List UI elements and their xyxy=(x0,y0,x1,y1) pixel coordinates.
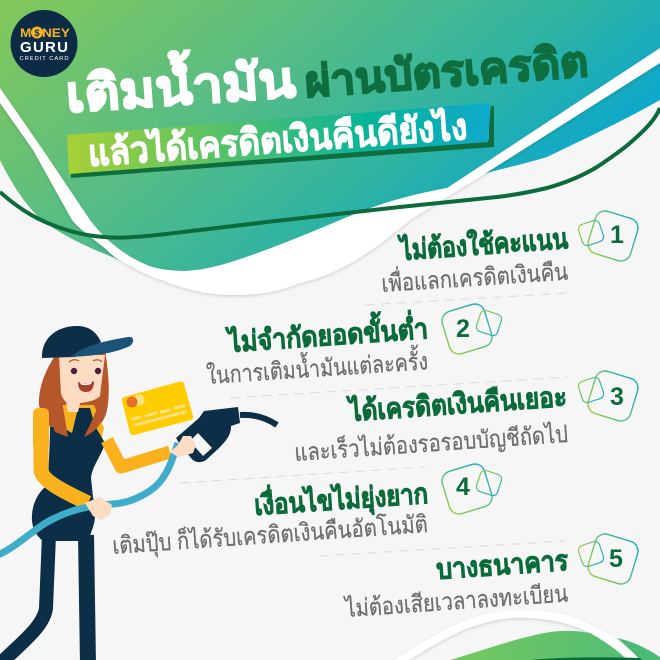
hair front strands xyxy=(50,355,68,437)
benefit 5 xyxy=(343,545,569,623)
benefit 4: เงื่อนไขไม่ยุ่งยาก xyxy=(253,473,429,523)
badge 3 xyxy=(577,369,640,423)
badge 2 xyxy=(440,302,503,356)
fuel nozzle xyxy=(176,407,277,462)
benefit 2: ไม่จำกัดยอดขั้นต่ำ xyxy=(224,307,429,358)
bottom wave xyxy=(395,614,660,660)
title line one: เติมน้ำมัน xyxy=(63,42,297,123)
benefit 5: ไม่ต้องเสียเวลาลงทะเบียน xyxy=(343,579,569,623)
badge 1: 1 xyxy=(610,221,624,249)
logo badge xyxy=(10,10,78,77)
header green wave xyxy=(0,0,660,271)
benefit 4 xyxy=(111,473,429,561)
badge 2: 2 xyxy=(456,315,470,343)
logo badge: GURU xyxy=(20,39,68,56)
title banner: แล้วได้เครดิตเงินคืนดียังไง xyxy=(87,105,469,174)
right hand xyxy=(170,436,196,457)
logo badge: $ xyxy=(34,28,40,38)
badge 5 xyxy=(577,532,640,586)
skirt and bib overalls xyxy=(32,408,105,541)
legs xyxy=(2,535,88,660)
title line one xyxy=(63,38,590,123)
benefit 3 xyxy=(293,380,569,467)
logo badge: CREDIT CARD xyxy=(20,56,68,62)
title line one: ผ่านบัตรเครดิต xyxy=(303,38,590,107)
shirt body xyxy=(52,405,104,445)
badge 4: 4 xyxy=(456,473,470,501)
left arm xyxy=(41,415,88,503)
hair back xyxy=(39,350,109,437)
hat dome xyxy=(42,326,101,358)
logo badge: MONEY xyxy=(20,26,70,40)
benefit 2: ในการเติมน้ำมันแต่ละครั้ง xyxy=(205,343,429,390)
benefit 1: ไม่ต้องใช้คะแนน xyxy=(397,222,569,266)
benefit 1: เพื่อแลกเครดิตเงินคืน xyxy=(380,255,569,298)
fuel hose xyxy=(0,443,178,555)
woman character with fuel nozzle xyxy=(0,326,277,660)
benefit 1 xyxy=(380,222,569,298)
benefit 2 xyxy=(205,307,429,390)
benefit 3: และเร็วไม่ต้องรอรอบบัญชีถัดไป xyxy=(293,419,569,467)
credit card xyxy=(122,381,193,435)
badge 4 xyxy=(440,462,503,516)
hat brim xyxy=(70,337,133,357)
mouth xyxy=(78,381,94,392)
right arm xyxy=(107,440,170,467)
eyes xyxy=(71,368,77,374)
badge 3: 3 xyxy=(610,383,624,411)
left hand xyxy=(85,497,112,520)
badge 1 xyxy=(577,209,640,263)
badge 5: 5 xyxy=(609,545,623,573)
white swoosh stripe xyxy=(0,48,660,295)
benefit 3: ได้เครดิตเงินคืนเยอะ xyxy=(346,380,568,427)
face xyxy=(59,355,105,412)
benefit 4: เติมปุ๊บ ก็ได้รับเครดิตเงินคืนอัตโนมัติ xyxy=(111,509,429,561)
benefit 5: บางธนาคาร xyxy=(435,545,569,585)
dark green curved line xyxy=(0,108,660,238)
